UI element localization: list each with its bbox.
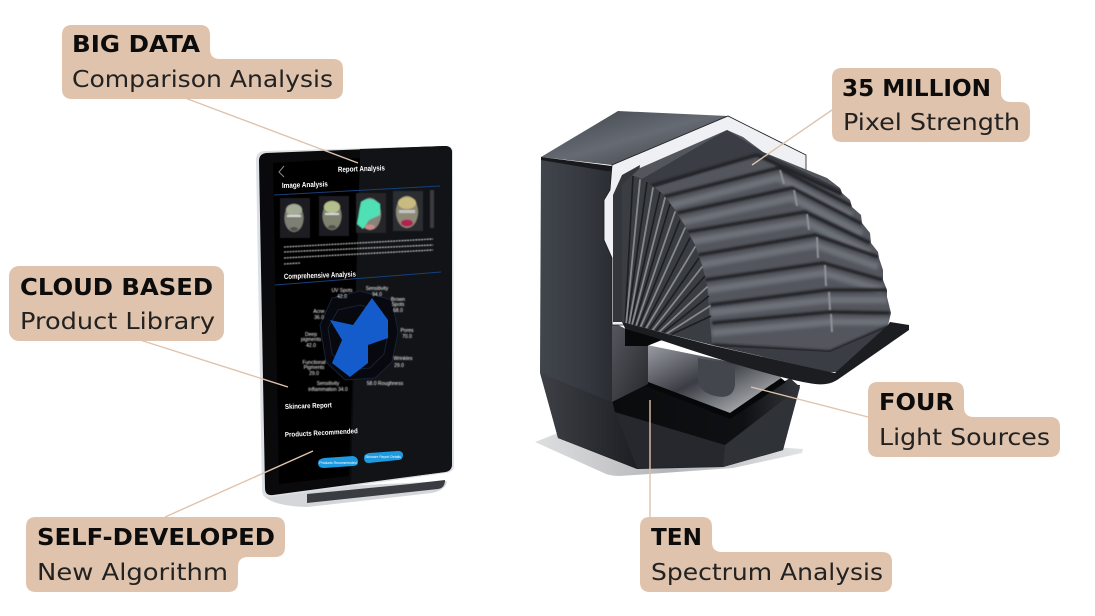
callout subheading: New Algorithm — [37, 558, 228, 586]
callout heading: SELF-DEVELOPED — [37, 523, 275, 551]
pleated hood — [622, 130, 891, 372]
top edge — [541, 157, 612, 172]
fold tray — [622, 322, 909, 384]
image analysis heading: Image Analysis — [282, 179, 328, 190]
radar labels: Functional — [302, 360, 326, 366]
radar labels: 42.0 — [306, 343, 316, 349]
callout heading: CLOUD BASED — [20, 273, 213, 301]
callout background — [832, 68, 1030, 142]
callout: self-developed — [26, 451, 313, 592]
product: tablet display — [256, 146, 454, 507]
callout background — [62, 25, 343, 99]
callout subheading: Light Sources — [879, 423, 1050, 451]
description text lines — [284, 239, 433, 264]
radar labels: Deep — [305, 332, 317, 338]
callout: big data — [62, 25, 358, 163]
lower hood fold — [712, 327, 888, 372]
lower middle facet — [615, 412, 783, 468]
connector line — [185, 98, 358, 163]
screen panel left — [273, 158, 360, 484]
steel base plate — [535, 433, 803, 476]
callout background — [640, 517, 892, 592]
tablet stand — [262, 480, 447, 507]
central lens — [698, 358, 735, 397]
radar labels: Sensitivity — [366, 286, 389, 292]
tablet body — [259, 146, 452, 495]
callout background — [868, 382, 1060, 457]
product: skin analyser device — [535, 111, 909, 476]
radar labels: 58.0 Roughness — [367, 381, 404, 387]
recessed opening — [647, 345, 781, 413]
button: products — [318, 456, 358, 468]
radar labels: UV Spots — [331, 288, 353, 294]
callout: 35 million — [752, 68, 1030, 165]
callout subheading: Comparison Analysis — [72, 65, 333, 93]
top dark ridges — [640, 130, 842, 195]
screen right half — [351, 146, 452, 484]
callout: ten — [640, 400, 892, 592]
radar labels: Brown — [391, 297, 405, 303]
callout subheading: Spectrum Analysis — [651, 558, 883, 586]
button: products: Products Recommended — [319, 461, 357, 465]
radar labels — [301, 286, 414, 393]
fan pleats — [622, 172, 712, 345]
body lower pillar — [612, 322, 648, 402]
radar labels: 42.0 — [337, 294, 347, 300]
products recommended heading: Products Recommended — [285, 428, 358, 439]
comprehensive analysis heading: Comprehensive Analysis — [284, 269, 356, 281]
button: recommended — [364, 451, 403, 463]
screen contents — [273, 158, 441, 484]
radar labels: inflammation 34.0 — [308, 387, 348, 393]
callout subheading: Pixel Strength — [843, 108, 1020, 136]
radar labels: Spots — [392, 302, 405, 308]
hood base — [622, 130, 891, 372]
divider — [274, 186, 440, 195]
radar chart — [320, 291, 398, 380]
radar labels: Pigments — [304, 365, 325, 371]
callout subheading: Product Library — [20, 307, 215, 335]
connector line — [140, 340, 288, 387]
white frame — [604, 116, 806, 325]
opening rim — [646, 378, 786, 419]
callout: cloud based — [9, 266, 288, 387]
tablet bezel — [256, 146, 454, 497]
callout background — [9, 266, 224, 341]
rib kink highlights — [780, 170, 832, 332]
radar labels: Pores — [400, 328, 414, 334]
divider — [275, 272, 441, 285]
rib highlights — [665, 178, 890, 333]
left body face — [540, 157, 612, 402]
radar labels: Acne — [313, 309, 325, 315]
radar labels: Wrinkles — [393, 356, 413, 362]
radar labels: Sensitivity — [317, 381, 340, 387]
callout heading: TEN — [651, 523, 702, 551]
radar labels: 68.0 — [393, 308, 403, 314]
radar labels: pigments — [301, 337, 322, 343]
radar labels: 29.0 — [394, 363, 404, 369]
radar labels: 29.0 — [309, 371, 319, 377]
back arrow — [279, 166, 284, 177]
connector line — [752, 110, 832, 165]
callout heading: FOUR — [879, 388, 954, 416]
connector line — [751, 387, 868, 417]
skincare report heading: Skincare Report — [285, 402, 333, 411]
face thumbnails — [280, 190, 434, 238]
radar labels: 36.0 — [314, 315, 324, 321]
hood backing — [613, 165, 640, 322]
rib grooves — [650, 155, 890, 352]
radar labels: 70.0 — [402, 334, 412, 340]
callout background — [26, 517, 285, 592]
radar labels: 94.0 — [372, 292, 382, 298]
lower left facet — [540, 373, 637, 468]
connector line — [165, 451, 313, 517]
lower right facet — [723, 387, 800, 467]
lower housing backing — [540, 370, 800, 469]
tray shadow — [625, 328, 662, 346]
callout heading: BIG DATA — [72, 30, 201, 58]
callout: four — [751, 382, 1060, 457]
lower bowl — [612, 378, 800, 445]
top face — [541, 111, 728, 165]
connector line — [649, 400, 651, 517]
button: recommended: Skincare Report Details — [365, 455, 401, 459]
screen title: Report Analysis — [338, 163, 385, 174]
callout heading: 35 MILLION — [842, 74, 991, 102]
